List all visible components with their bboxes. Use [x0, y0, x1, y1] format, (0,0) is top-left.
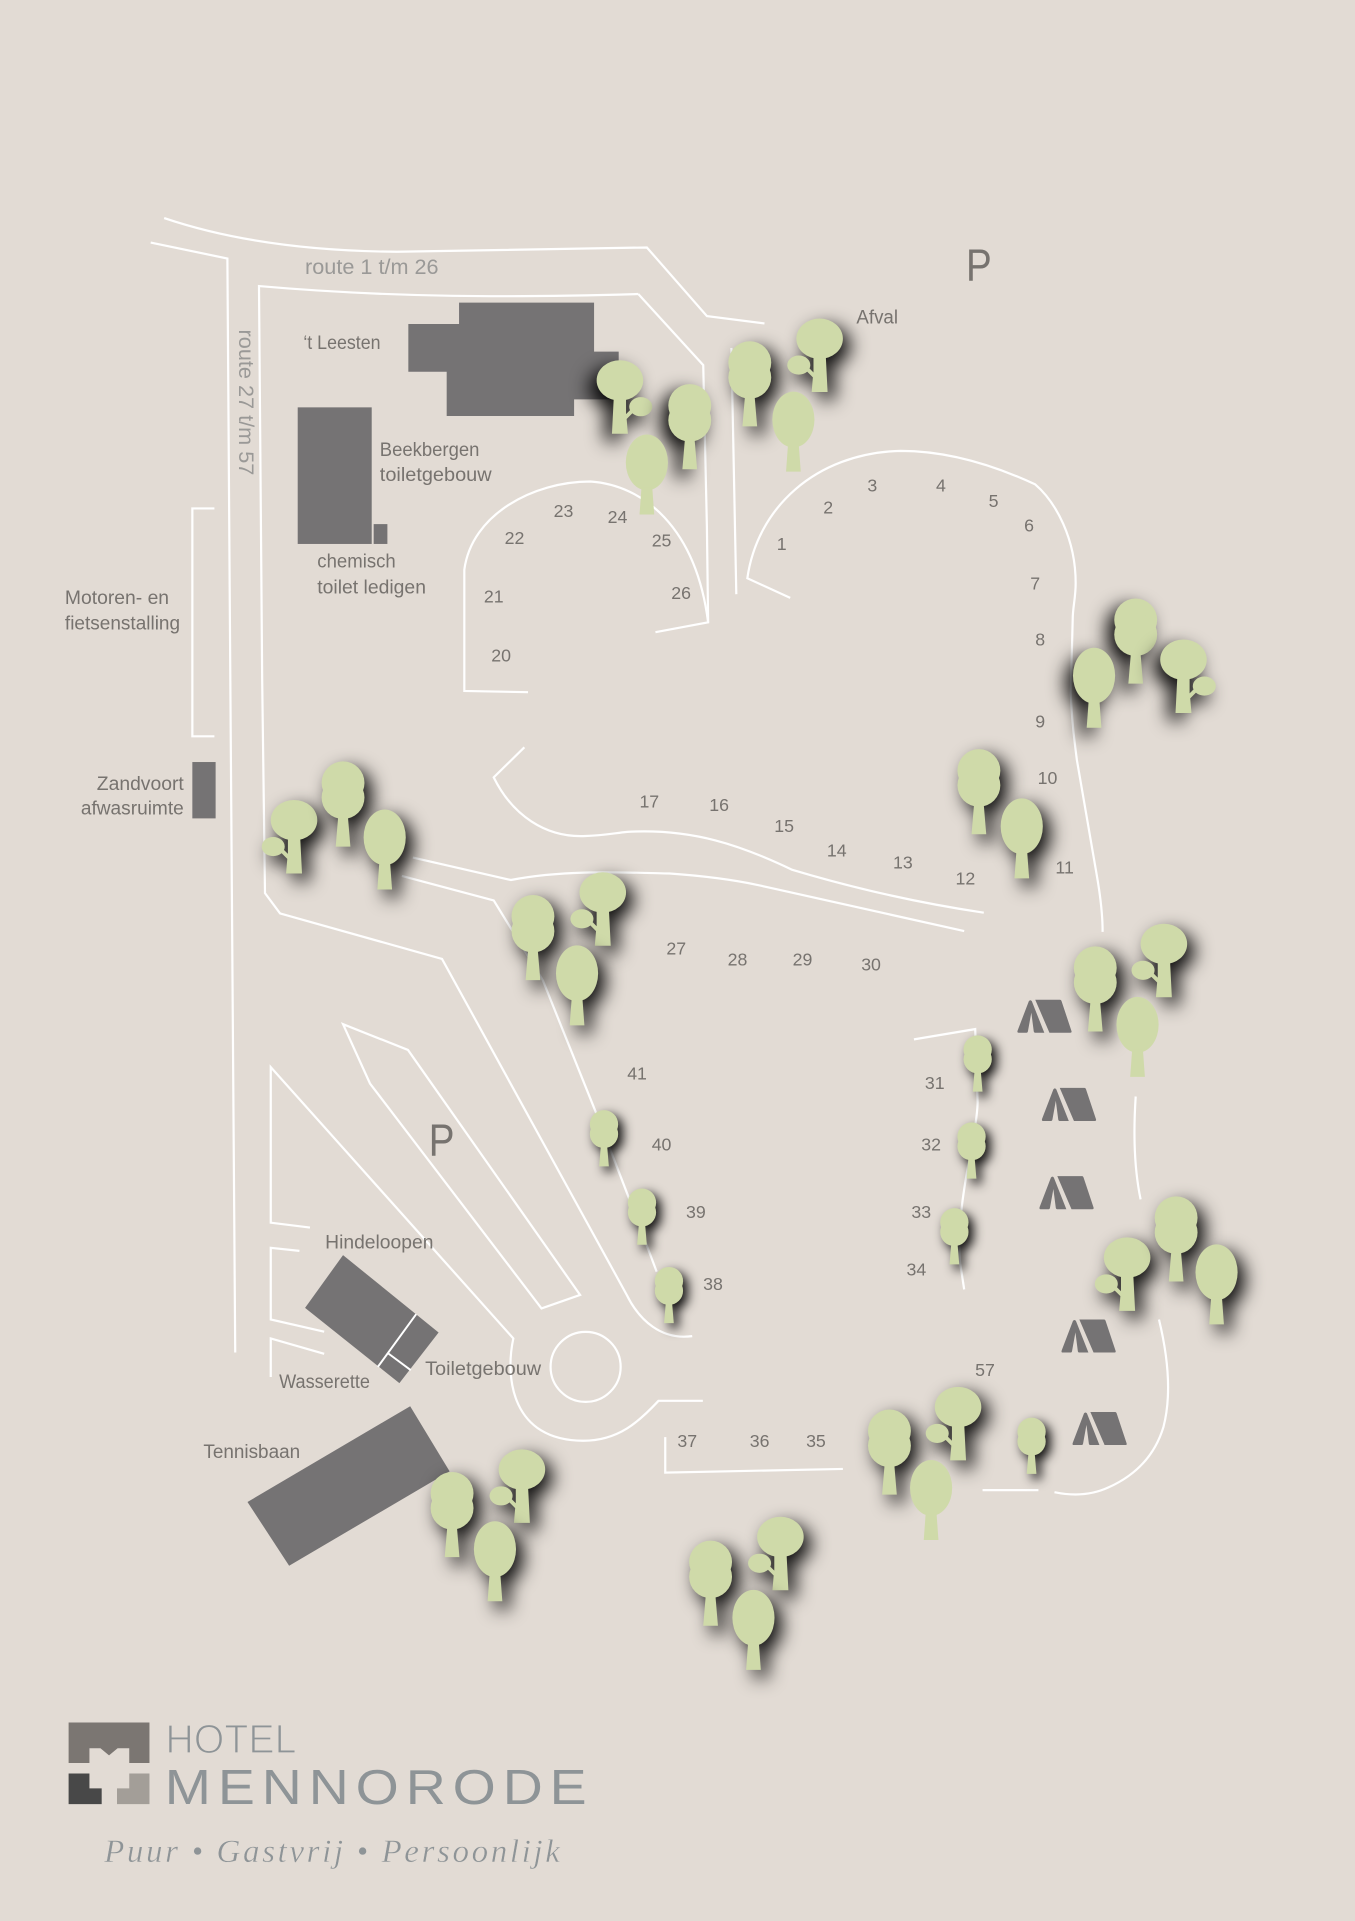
pitch numbers: 29 — [793, 949, 812, 969]
pitch numbers: 4 — [936, 475, 946, 495]
pitch numbers: 36 — [750, 1431, 770, 1451]
icon: tent 3 — [1039, 1176, 1094, 1209]
pitch numbers: 33 — [911, 1202, 931, 1222]
label: Wasserette: Wasserette — [279, 1371, 370, 1393]
roads and paths — [151, 218, 1168, 1495]
tree cluster: centre — [511, 872, 626, 1025]
pitch numbers: 30 — [861, 954, 881, 974]
label: route 27 t/m 57: route 27 t/m 57 — [234, 330, 258, 475]
building: Tennisbaan — [247, 1406, 450, 1566]
tents — [1017, 1000, 1127, 1445]
parking sign: lower: P — [429, 1114, 455, 1165]
pitch numbers: 1 — [777, 534, 787, 554]
pitch numbers: 15 — [774, 816, 794, 836]
pitch numbers: 21 — [484, 587, 504, 607]
label: chemisch toilet ledigen: chemisch — [317, 551, 396, 573]
label: 't Leesten: ‘t Leesten — [303, 332, 381, 354]
pitch numbers: 25 — [652, 530, 672, 550]
pitch numbers: 3 — [867, 475, 877, 495]
tree cluster: south — [689, 1517, 804, 1670]
parking sign: top: P — [966, 240, 992, 291]
tree cluster: pitches 10-12 — [957, 749, 1043, 878]
pitch numbers: 32 — [921, 1134, 941, 1154]
building: Beekbergen toiletgebouw — [298, 407, 372, 544]
wordmark: HOTEL: HOTEL — [165, 1716, 296, 1762]
logo: Hotel Mennorode — [69, 1716, 594, 1870]
pitch numbers: 20 — [491, 646, 511, 666]
label: Zandvoort afwasruimte: Zandvoort — [97, 773, 184, 795]
pitch numbers: 57 — [975, 1360, 995, 1380]
pitch numbers: 41 — [627, 1063, 647, 1083]
small trees along paths — [590, 1035, 1046, 1474]
label: Motoren- en fietsenstalling: Motoren- en — [65, 587, 169, 609]
pitch numbers: 14 — [827, 840, 847, 860]
pitch numbers: 12 — [956, 869, 975, 889]
pitch numbers: 13 — [893, 853, 913, 873]
tree cluster: tents north — [1074, 924, 1187, 1077]
pitch numbers: 34 — [907, 1259, 926, 1279]
icon: tent 5 — [1073, 1412, 1127, 1445]
building: Hindeloopen and Toiletgebouw — [305, 1255, 439, 1383]
wordmark: MENNORODE: MENNORODE — [165, 1761, 594, 1815]
label: Zandvoort afwasruimte — [81, 773, 184, 820]
tree cluster: tennis court — [431, 1449, 545, 1601]
pitch numbers: 5 — [989, 491, 999, 511]
tagline: Puur • Gastvrij • Persoonlijk — [103, 1834, 561, 1870]
pitch numbers: 24 — [608, 507, 627, 527]
label: Toiletgebouw: Toiletgebouw — [425, 1358, 542, 1380]
tree cluster: Afval — [728, 319, 843, 472]
pitch numbers: 7 — [1030, 573, 1040, 593]
pitch numbers: 39 — [686, 1202, 706, 1222]
icon: logo mark — [69, 1723, 149, 1804]
pitch numbers: 35 — [806, 1431, 826, 1451]
label: Hindeloopen: Hindeloopen — [325, 1231, 433, 1253]
building: chemisch toilet ledigen — [374, 524, 387, 544]
icon: tent 2 — [1042, 1088, 1096, 1121]
label: Tennisbaan: Tennisbaan — [203, 1441, 300, 1463]
building: 't Leesten — [408, 303, 619, 416]
icon: tent 4 — [1061, 1319, 1116, 1353]
label: Zandvoort afwasruimte: afwasruimte — [81, 798, 184, 820]
pitch numbers: 10 — [1038, 768, 1057, 788]
pitch numbers: 23 — [554, 501, 574, 521]
label: Beekbergen toiletgebouw: Beekbergen — [380, 439, 479, 461]
pitch numbers: 40 — [652, 1134, 672, 1154]
pitch numbers: 22 — [505, 528, 524, 548]
label: Beekbergen toiletgebouw — [380, 439, 493, 486]
tree cluster: east of pitch 8 — [1073, 598, 1216, 728]
tree cluster: tents east — [1095, 1196, 1238, 1324]
pitch numbers: 8 — [1035, 630, 1045, 650]
pitch numbers: 17 — [639, 791, 659, 811]
label: Afval: Afval — [856, 306, 898, 328]
pitch numbers: 31 — [925, 1073, 945, 1093]
pitch numbers: 11 — [1055, 858, 1074, 878]
pitch numbers: 37 — [677, 1431, 697, 1451]
tree cluster: west — [262, 761, 406, 889]
building: Zandvoort afwasruimte — [192, 762, 216, 818]
icon: tent 1 — [1017, 1000, 1072, 1033]
pitch numbers: 2 — [823, 497, 833, 517]
tree cluster: south east — [868, 1387, 981, 1540]
pitch numbers: 6 — [1024, 516, 1034, 536]
pitch numbers: 28 — [728, 949, 748, 969]
pitch numbers — [484, 475, 1074, 1451]
pitch numbers: 16 — [709, 795, 729, 815]
label: route 1 t/m 26: route 1 t/m 26 — [305, 255, 439, 279]
label: chemisch toilet ledigen: toilet ledigen — [317, 576, 426, 598]
pitch numbers: 27 — [666, 938, 686, 958]
pitch numbers: 26 — [671, 583, 691, 603]
pitch numbers: 38 — [703, 1274, 723, 1294]
tree cluster: top centre — [597, 360, 711, 515]
label: chemisch toilet ledigen — [317, 551, 426, 598]
pitch numbers: 9 — [1035, 712, 1045, 732]
label: Motoren- en fietsenstalling: fietsenstalling — [65, 612, 180, 634]
label: Motoren- en fietsenstalling — [65, 587, 180, 634]
label: Beekbergen toiletgebouw: toiletgebouw — [380, 464, 493, 486]
